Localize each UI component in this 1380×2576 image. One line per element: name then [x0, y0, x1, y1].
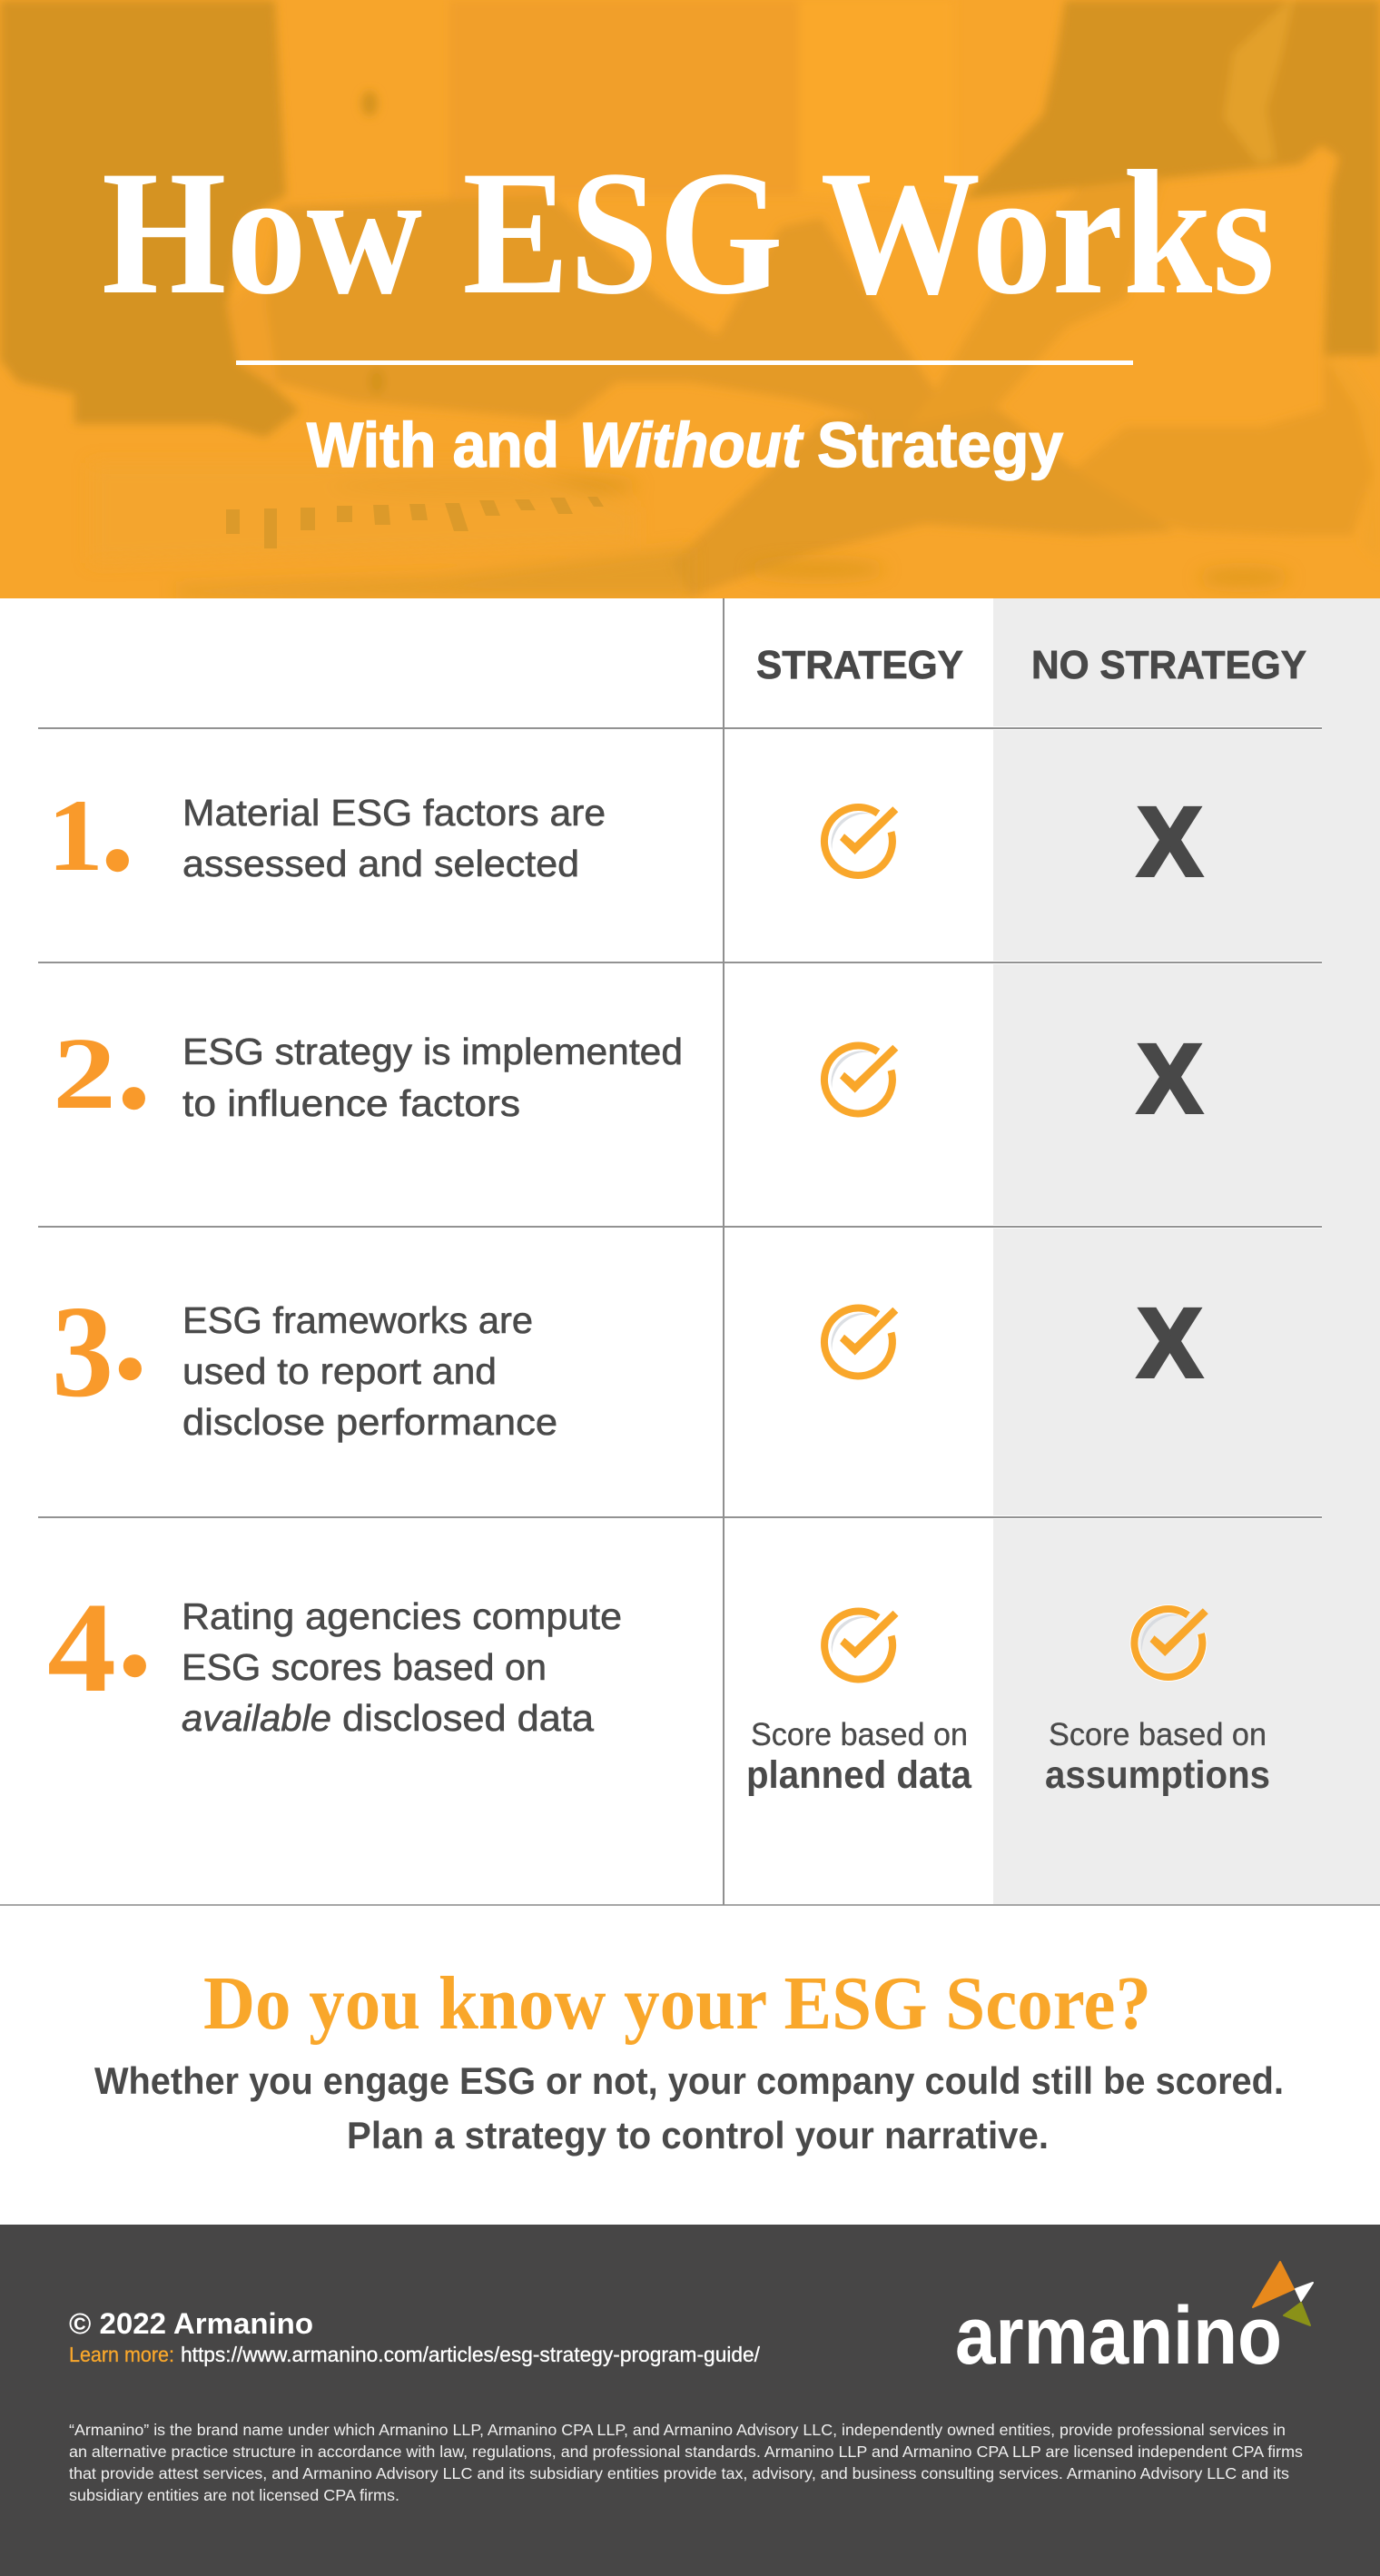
row 2 text: to influence factors [182, 1082, 520, 1124]
row 1 text [182, 792, 606, 884]
number 2: . [116, 982, 152, 1139]
logo: armanino: armanino [955, 2291, 1282, 2382]
row 4 text: disclosed data [342, 1697, 594, 1739]
legal disclaimer: subsidiary entities are not licensed CPA firms. [69, 2486, 399, 2504]
row 1 text: assessed and selected [182, 843, 579, 884]
number 3: . [113, 1253, 148, 1409]
row 4 text: available [182, 1697, 331, 1739]
number 1: 1 [47, 779, 104, 893]
row 3 text: disclose performance [182, 1401, 557, 1443]
callout text: Plan a strategy to control your narrative. [347, 2114, 1049, 2157]
row 2 [53, 982, 1202, 1139]
number 1: . [100, 745, 135, 901]
legal disclaimer [69, 2421, 1303, 2504]
icon: check, strategy [824, 1611, 899, 1679]
subtitle: Without [579, 410, 804, 480]
row 3 text: used to report and [182, 1350, 497, 1392]
callout heading: Do you know your ESG Score? [203, 1961, 1151, 2046]
title: How ESG Works [102, 134, 1275, 331]
icon: check, strategy [824, 806, 898, 875]
row 3 text [182, 1299, 557, 1443]
column heading: strategy: STRATEGY [756, 643, 963, 687]
panel: no strategy column background [993, 598, 1380, 1905]
subtitle: With and [307, 410, 559, 480]
panel: header banner with photo [0, 0, 1380, 598]
score note: planned data: planned data [746, 1753, 972, 1797]
icon: check, strategy [824, 1308, 898, 1376]
learn more link: https://www.armanino.com/articles/esg-strategy-program-guide/ [181, 2343, 761, 2366]
row 2 text [182, 1031, 683, 1124]
row 4 text [182, 1595, 622, 1739]
legal disclaimer: that provide attest services, and Armanino Advisory LLC and its subsidiary entities provide tax, advisory, and business consulting services. Armanino Advisory LLC and its [69, 2464, 1289, 2482]
number 1 [47, 745, 135, 901]
score note: assumptions: assumptions [1045, 1753, 1270, 1797]
legal disclaimer: “Armanino” is the brand name under which Armanino LLP, Armanino CPA LLP, and Armanino Advisory LLC, independently owned entities, provide professional services in [69, 2421, 1286, 2439]
icon: check, no strategy [1134, 1608, 1208, 1677]
icon: x, no strategy: X [1138, 1288, 1202, 1397]
number 3: 3 [52, 1279, 113, 1425]
row 1 text: Material ESG factors are [182, 792, 606, 834]
column heading: no strategy: NO STRATEGY [1031, 643, 1306, 687]
callout text [94, 2059, 1284, 2157]
score note: assumptions: Score based on [1049, 1717, 1267, 1752]
row 1 [47, 745, 1202, 901]
icon: x, no strategy: X [1138, 786, 1202, 896]
row 2 text: ESG strategy is implemented [182, 1031, 683, 1072]
callout text: Whether you engage ESG or not, your company could still be scored. [94, 2059, 1284, 2102]
learn more link: Learn more: [69, 2343, 174, 2366]
row 3 text: ESG frameworks are [182, 1299, 533, 1341]
row 4 text: Rating agencies compute [182, 1595, 622, 1637]
row 3 [52, 1253, 1202, 1443]
icon: check, strategy [824, 1045, 898, 1113]
copyright: © 2022 Armanino [69, 2307, 313, 2340]
score note: planned data: Score based on [751, 1717, 968, 1752]
row 4 [47, 1550, 1270, 1797]
number 4: 4 [47, 1575, 116, 1719]
icon: x, no strategy: X [1138, 1023, 1202, 1133]
row 4 text: ESG scores based on [182, 1646, 547, 1688]
panel: footer [0, 2225, 1380, 2576]
number 2 [53, 982, 152, 1139]
subtitle [307, 410, 1063, 480]
number 4: . [117, 1550, 153, 1706]
number 2: 2 [53, 1017, 116, 1130]
subtitle: Strategy [817, 410, 1063, 480]
legal disclaimer: an alternative practice structure in accordance with law, regulations, and professional standards. Armanino LLP and Armanino CPA LLP are licensed independent CPA firms [69, 2443, 1303, 2461]
score note: assumptions [1045, 1717, 1270, 1797]
score note: planned data [746, 1717, 972, 1797]
number 4 [47, 1550, 153, 1719]
number 3 [52, 1253, 148, 1425]
